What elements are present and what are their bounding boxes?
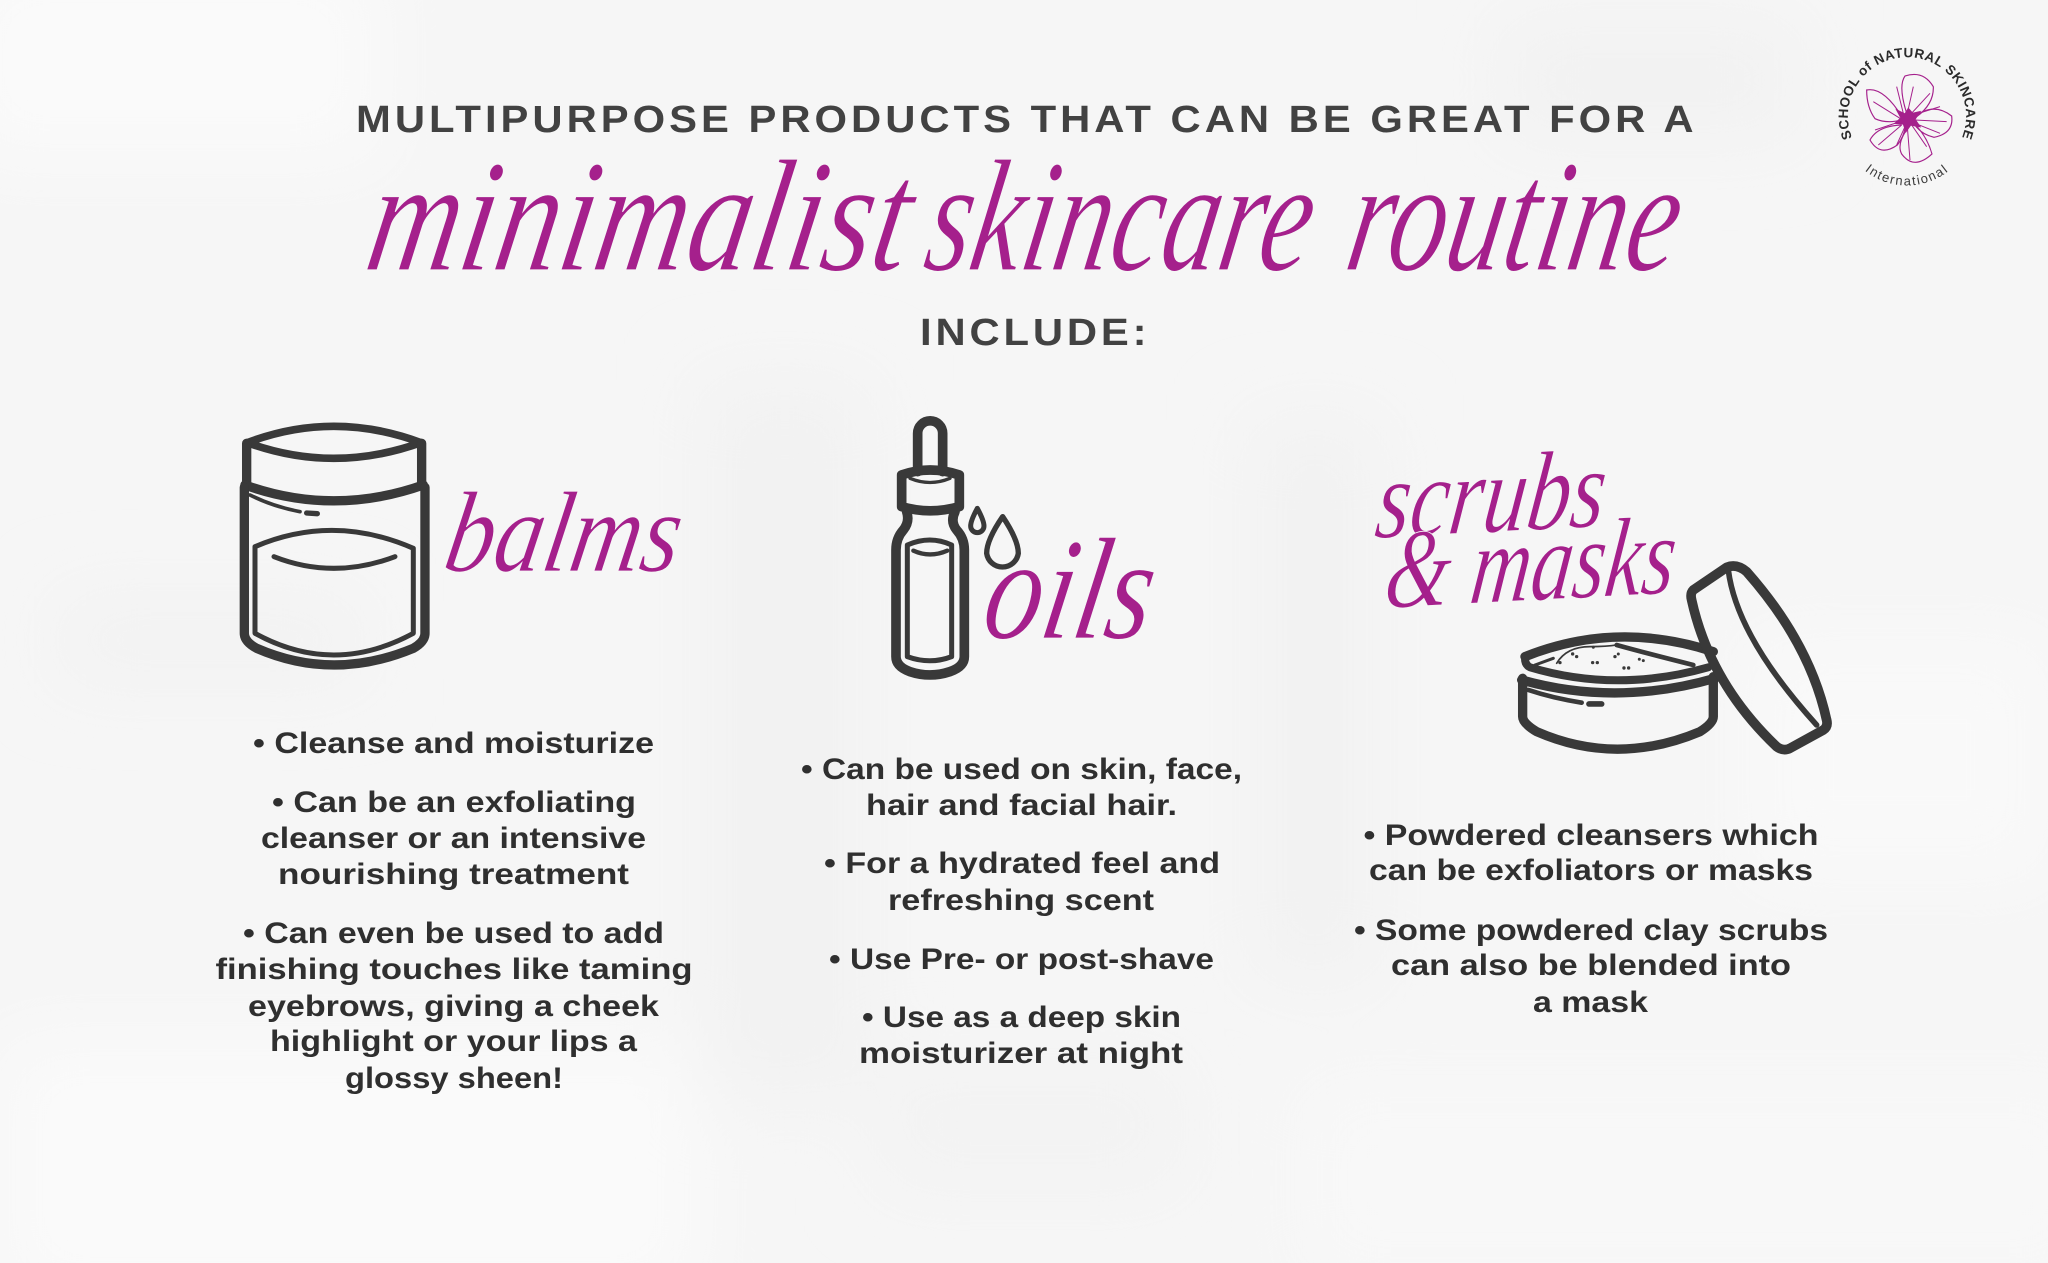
text block: scrubs bullets [1354,819,1828,1019]
script heading [356,127,1697,305]
label: oils: oils [973,509,1169,670]
text block: oils bullets: • Can be used on skin, face, [801,753,1242,786]
text block: balms bullets [216,727,692,1095]
heading include: INCLUDE: [920,312,1147,354]
icon: flower [1867,74,1952,162]
icon: open pot with lid [1522,566,1827,750]
panel: balms [216,426,693,1095]
text block: oils bullets: hair and facial hair. [866,789,1177,822]
text block: scrubs bullets: • Some powdered clay scrubs [1354,914,1828,947]
logo ring text: SCHOOL of NATURAL SKINCARE [1838,48,1976,140]
text block: scrubs bullets: can be exfoliators or masks [1369,854,1813,887]
text block: oils bullets [801,753,1242,1070]
text block: oils bullets: • Use as a deep skin [862,1001,1181,1034]
label: scrubs and masks: & masks [1379,493,1684,633]
text block: balms bullets: finishing touches like taming [216,953,692,986]
text block: balms bullets: cleanser or an intensive [261,822,646,855]
icon: balm jar [244,426,425,665]
text block: oils bullets: • For a hydrated feel and [824,847,1220,880]
text block: balms bullets: eyebrows, giving a cheek [248,990,659,1023]
text block: oils bullets: refreshing scent [888,884,1154,917]
text block: scrubs bullets: a mask [1533,986,1648,1019]
logo ring text [1838,48,1976,186]
logo [1838,48,1976,186]
script heading: minimalist [356,127,931,305]
text block: balms bullets: nourishing treatment [278,858,629,891]
heading line one: MULTIPURPOSE PRODUCTS THAT CAN BE GREAT FOR A [356,99,1694,141]
label: scrubs and masks: scrubs [1370,426,1614,563]
text block: balms bullets: • Cleanse and moisturize [253,727,654,760]
script heading: skincare [915,127,1330,305]
label: balms: balms [436,470,693,597]
text block: scrubs bullets: • Powdered cleansers which [1364,819,1818,852]
icon: dropper bottle [896,421,1018,675]
text block: balms bullets: highlight or your lips a [270,1025,637,1058]
title [356,99,1697,305]
text block: balms bullets: glossy sheen! [345,1062,563,1095]
text block: oils bullets: • Use Pre- or post-shave [829,943,1214,976]
label: scrubs and masks [1370,426,1684,633]
text block: oils bullets: moisturizer at night [859,1037,1183,1070]
panel: oils [801,421,1242,1070]
text block: balms bullets: • Can be an exfoliating [272,786,636,819]
text block: balms bullets: • Can even be used to add [243,917,664,950]
panel: scrubs and masks [1354,426,1828,1019]
logo ring text: International [1866,164,1948,186]
script heading: routine [1336,127,1697,305]
text block: scrubs bullets: can also be blended into [1391,949,1791,982]
